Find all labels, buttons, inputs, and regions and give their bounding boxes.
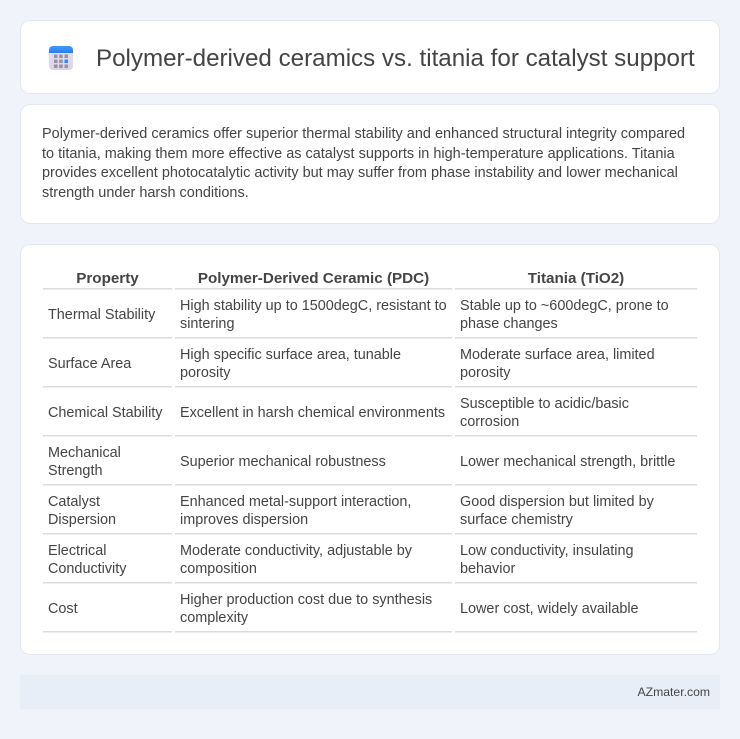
row: Mechanical Strength: Superior mechanical robustness <box>180 454 386 470</box>
row: Electrical Conductivity: behavior <box>460 561 515 577</box>
row: Catalyst Dispersion: Dispersion <box>48 512 116 528</box>
row: Electrical Conductivity: composition <box>180 561 257 577</box>
row: Electrical Conductivity: Conductivity <box>48 561 126 577</box>
row: Thermal Stability: Thermal Stability <box>48 307 155 323</box>
row: Thermal Stability: Stable up to ~600degC, prone to <box>460 298 669 314</box>
row: Cost: Lower cost, widely available <box>460 601 639 617</box>
row: Surface Area: porosity <box>180 365 230 381</box>
row: Catalyst Dispersion: Enhanced metal-support interaction, <box>180 494 411 510</box>
row: Mechanical Strength: Mechanical <box>48 445 121 461</box>
row: Catalyst Dispersion: improves dispersion <box>180 512 308 528</box>
column header: Titania: Titania (TiO2) <box>528 270 624 287</box>
column header: Polymer-Derived Ceramic: Polymer-Derived Ceramic (PDC) <box>198 270 429 287</box>
summary text <box>42 126 685 200</box>
row: Thermal Stability: sintering <box>180 316 234 332</box>
panel: summary card <box>20 104 720 224</box>
row: Cost: complexity <box>180 610 248 626</box>
panel: title card <box>20 20 720 94</box>
row: Cost: Cost <box>48 601 78 617</box>
column header: Property: Property <box>76 270 139 287</box>
row: Chemical Stability: Susceptible to acidic/basic <box>460 396 629 412</box>
summary text: Polymer-derived ceramics offer superior thermal stability and enhanced structural integrity compared <box>42 126 685 142</box>
row: Catalyst Dispersion: surface chemistry <box>460 512 573 528</box>
row: Electrical Conductivity <box>48 543 634 577</box>
row: Chemical Stability: Chemical Stability <box>48 405 162 421</box>
row: Catalyst Dispersion: Good dispersion but limited by <box>460 494 654 510</box>
row: Surface Area: porosity <box>460 365 510 381</box>
footer source text: AZmater.com <box>638 685 710 699</box>
row: Surface Area: High specific surface area, tunable <box>180 347 401 363</box>
row: Surface Area: Moderate surface area, limited <box>460 347 655 363</box>
row: Cost <box>48 592 639 626</box>
row: Electrical Conductivity: Electrical <box>48 543 106 559</box>
row: Chemical Stability: Excellent in harsh chemical environments <box>180 405 445 421</box>
row: Chemical Stability: corrosion <box>460 414 519 430</box>
icon: calendar grid <box>49 46 73 70</box>
row: Chemical Stability <box>48 396 629 430</box>
summary text: provides excellent photocatalytic activity but may suffer from phase instability and lower mechanical <box>42 165 678 181</box>
footer bar <box>20 675 720 709</box>
row: Surface Area <box>48 347 655 381</box>
row: Thermal Stability: phase changes <box>460 316 558 332</box>
panel: comparison table card <box>20 244 720 655</box>
row: Electrical Conductivity: Moderate conductivity, adjustable by <box>180 543 412 559</box>
row: Surface Area: Surface Area <box>48 356 131 372</box>
row: Mechanical Strength <box>48 445 675 479</box>
row: Thermal Stability <box>48 298 669 332</box>
row: Cost: Higher production cost due to synthesis <box>180 592 432 608</box>
title: Polymer-derived ceramics vs. titania for catalyst support <box>96 45 695 72</box>
summary text: to titania, making them more effective as catalyst supports in high-temperature applications. Titania <box>42 146 675 162</box>
row: Thermal Stability: High stability up to 1500degC, resistant to <box>180 298 447 314</box>
row: Electrical Conductivity: Low conductivity, insulating <box>460 543 634 559</box>
row: Catalyst Dispersion <box>48 494 654 528</box>
row: Mechanical Strength: Lower mechanical strength, brittle <box>460 454 675 470</box>
row: Mechanical Strength: Strength <box>48 463 102 479</box>
summary text: strength under harsh conditions. <box>42 184 249 200</box>
row: Catalyst Dispersion: Catalyst <box>48 494 100 510</box>
